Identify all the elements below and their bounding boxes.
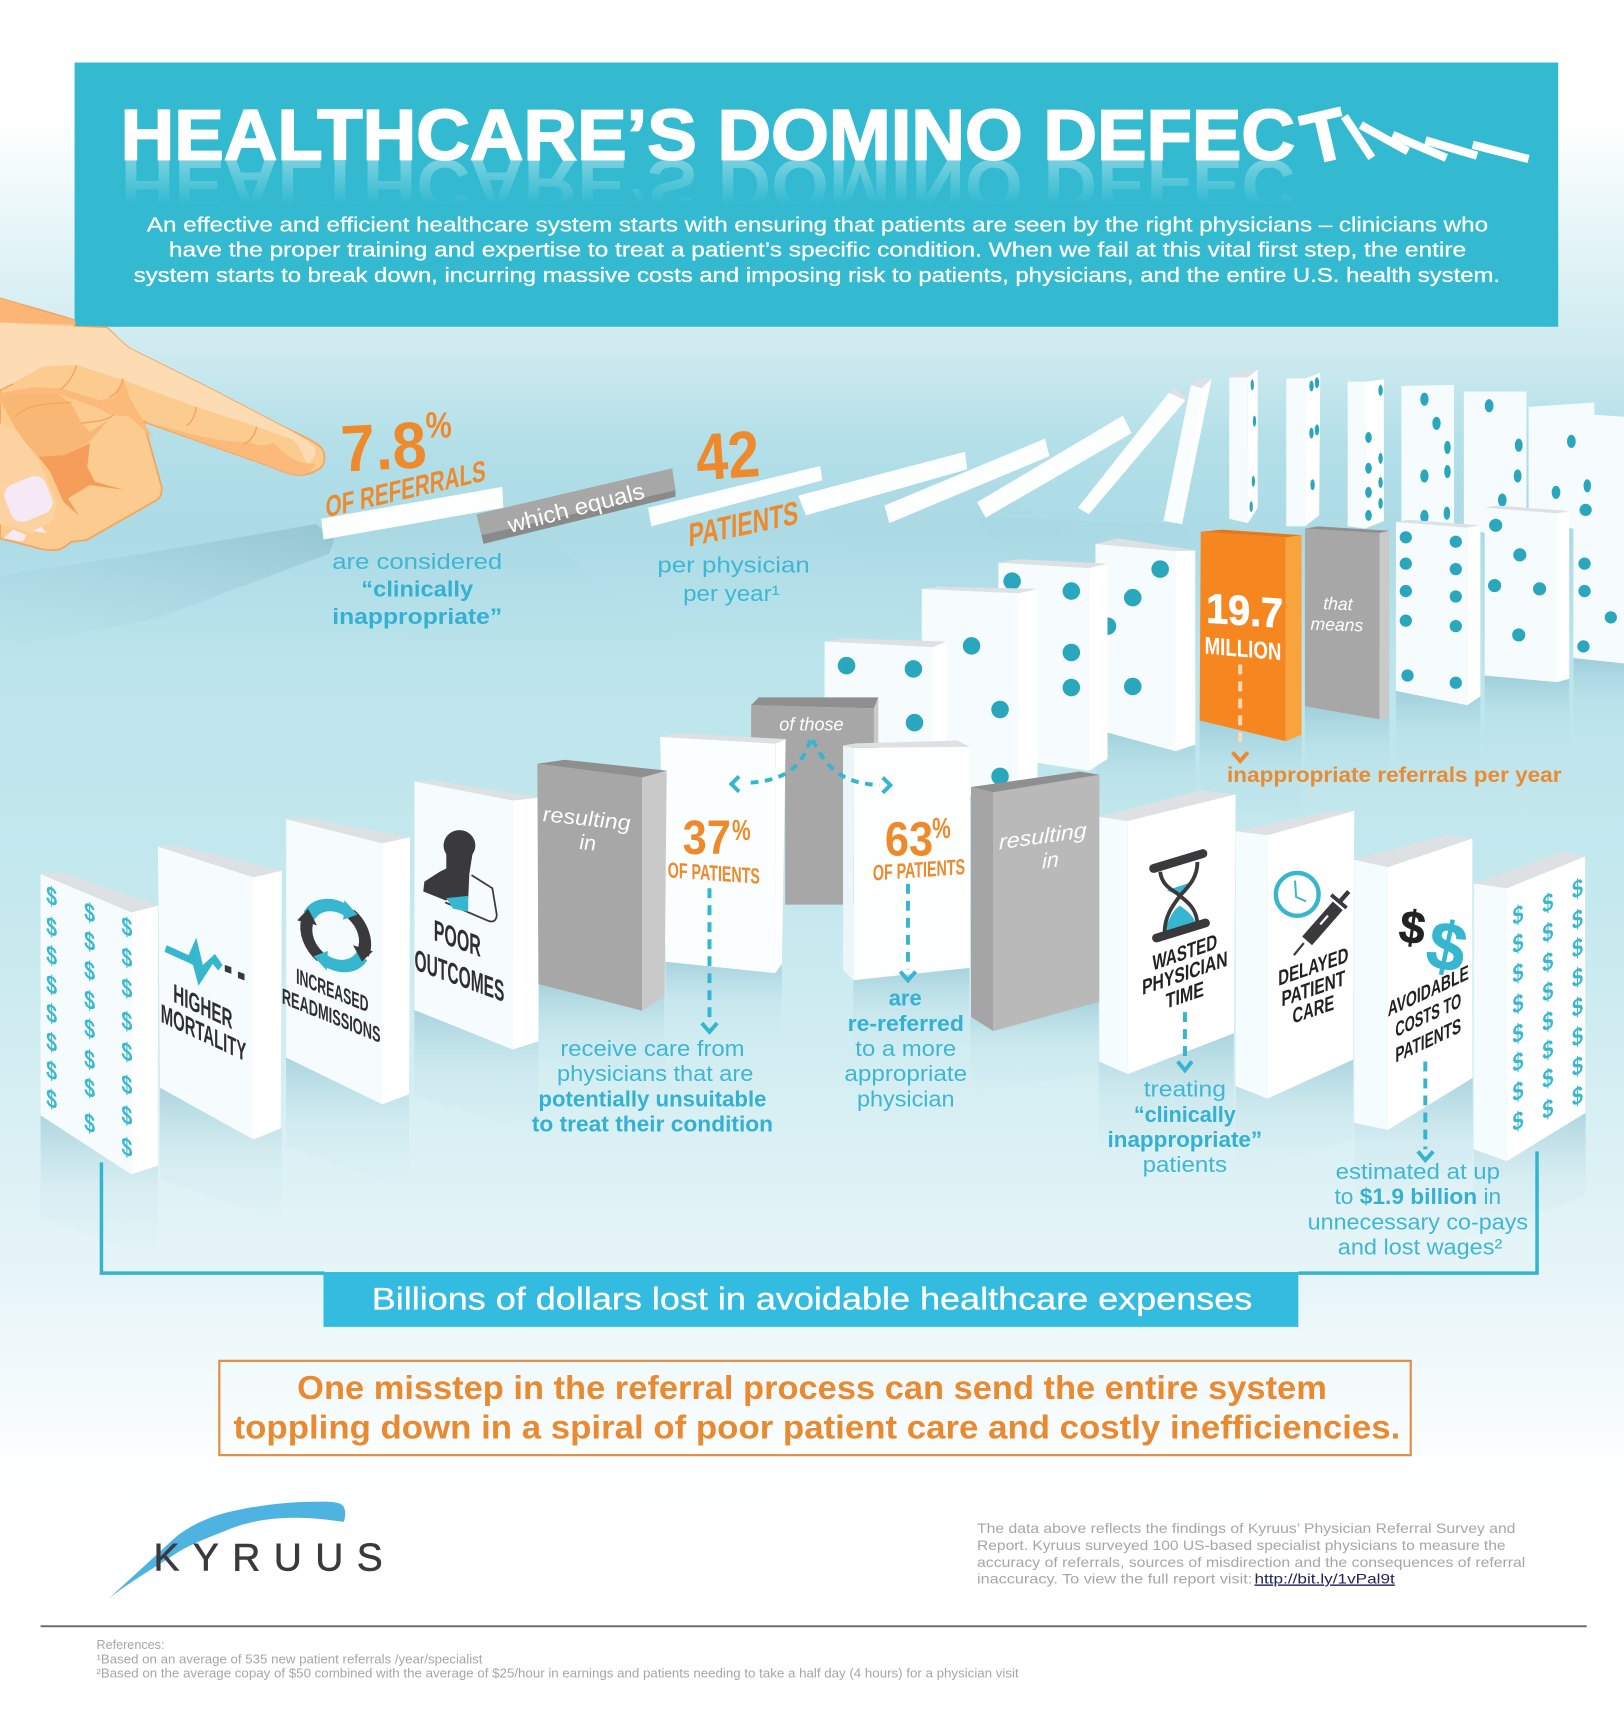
arrow: 63% down [900,884,916,980]
stat: 7.8% of referrals: 7.8 [339,407,428,486]
domino: delayed patient care [1236,811,1354,1098]
logo: Kyruus [109,1502,383,1599]
domino: dollars right: $ [1542,975,1553,1008]
caption: re-referred: to a more [855,1036,956,1061]
domino: ten dots [1396,520,1480,705]
callout: one misstep: toppling down in a spiral of poor patient care and costly inefficiencies. [234,1409,1400,1446]
intro paragraph: An effective and efficient healthcare system starts with ensuring that patients are seen by the right physicians – clinicians who [147,214,1488,236]
caption: estimated: estimated at up [1336,1159,1500,1184]
caption: per physician per year: per year¹ [683,581,780,606]
domino: dollars left: $ [84,1012,95,1045]
domino: dollars left: $ [46,997,57,1030]
domino: dollars left: $ [46,1083,57,1115]
domino: wasted physician time: PHYSICIAN [1142,946,1228,1000]
domino: resulting in (left): in [579,830,596,856]
domino: poor outcomes: OUTCOMES [414,943,504,1009]
stat: 7.8% of referrals: OF REFERRALS [326,455,486,524]
domino: dollars left: $ [84,954,95,987]
survey note: inaccuracy. To view the full report visit: [977,1571,1252,1587]
domino: avoidable costs to patients [1354,834,1473,1130]
references [96,1638,1019,1681]
domino: 19.7 million orange: MILLION [1205,633,1281,666]
domino: dollars right: $ [1542,945,1553,978]
references: References: [96,1638,164,1652]
domino: higher mortality [158,845,282,1139]
domino: dollars left: $ [84,1043,95,1076]
domino: dollars right: $ [1512,1017,1523,1049]
caption: receive care: receive care from [560,1036,745,1061]
domino: dollars right [1474,851,1585,1161]
falling domino 5 [884,439,1049,523]
domino: dollars right: $ [1572,1020,1583,1053]
domino: increased readmissions: INCREASED [296,963,368,1017]
dominoes with dots: stepped [1095,538,1195,751]
domino: far right partial [1573,493,1624,663]
domino: dollars left: $ [121,910,132,943]
domino: dollars left: $ [121,1005,132,1037]
domino: poor outcomes [414,780,540,1049]
standing domino 4 [1401,385,1454,526]
caption: receive care: potentially unsuitable [538,1086,766,1111]
caption: estimated: unnecessary co-pays [1308,1209,1528,1234]
icon: syringe [1294,892,1349,955]
caption: estimated: and lost wages² [1338,1234,1503,1259]
arrow: avoidable costs down [1418,1061,1433,1160]
domino: poor outcomes: POOR [434,914,481,964]
caption: receive care [532,1036,773,1137]
domino: dollars left: $ [84,925,95,957]
domino: dollars right: $ [1572,990,1583,1023]
domino: increased readmissions [282,818,410,1104]
domino: dollars right: $ [1512,927,1523,960]
banner: billions of dollars [323,1272,1298,1327]
domino: dollars left: $ [121,972,132,1004]
stat: 42 patients [689,416,798,555]
domino: which equals [476,468,675,544]
back row: standing dominoes [1229,370,1624,546]
domino: dollars left: $ [121,941,132,974]
domino: dollars right: $ [1542,1005,1553,1037]
domino: dollars right: $ [1512,1045,1523,1078]
domino: dollars left: $ [121,1131,132,1164]
domino: dollars left [41,872,158,1174]
domino: delayed patient care: CARE [1293,990,1334,1029]
caption: re-referred: are [889,986,922,1011]
caption: estimated [1308,1159,1528,1259]
caption: clinically inappropriate: are considered [332,549,502,574]
falling domino 6 [977,416,1132,518]
caption: per physician per year: per physician [657,552,810,577]
domino: dollars right: $ [1572,1050,1583,1082]
domino: dollars right: $ [1542,1062,1553,1094]
domino: 63% of patients: OF PATIENTS [873,854,965,885]
stat: 7.8% of referrals [326,405,486,524]
domino: that means: means [1310,614,1364,635]
domino: dollars left: $ [121,1068,132,1101]
caption: treating: patients [1143,1152,1227,1177]
banner: billions of dollars: Billions of dollars lost in avoidable healthcare expenses [372,1280,1252,1316]
arrow: wasted time down [1178,1012,1192,1070]
survey note [977,1521,1525,1587]
domino: dollars right: $ [1542,916,1553,949]
domino: 63% of patients: % [932,813,951,845]
domino: dollars left: $ [46,969,57,1001]
domino: dollars right: $ [1572,961,1583,994]
middle row right: dots dominoes [825,493,1624,795]
floor shadows beneath dominoes [41,469,1624,1261]
falling domino 8 [1163,378,1212,524]
domino: avoidable costs to patients: PATIENTS [1395,1013,1461,1067]
stat: 42 patients: 42 [693,416,762,494]
standing domino 7 [1591,415,1624,515]
standing domino 2 [1286,373,1320,526]
header panel [75,63,1558,327]
caption: treating: inappropriate” [1108,1127,1262,1152]
falling domino 4 [798,452,967,515]
domino: dollars left: $ [46,880,57,912]
domino: 37% of patients [660,733,786,973]
caption: clinically inappropriate: “clinically [361,577,474,602]
domino: dollars left: $ [84,896,95,929]
domino: dollars left: $ [121,1035,132,1068]
domino: resulting in (right): resulting [999,818,1087,854]
domino: delayed patient care: DELAYED [1278,942,1348,991]
domino: resulting in (left) [537,760,667,1011]
caption: clinically inappropriate [332,549,502,629]
domino: dollars left: $ [84,1072,95,1104]
icon: clock [1276,873,1319,916]
domino: dollars left: $ [46,939,57,972]
domino: 63% of patients: 63 [885,812,933,866]
domino: resulting in (right): in [1042,847,1059,874]
stat: 42 patients: PATIENTS [689,495,798,555]
survey note: Report. Kyruus surveyed 100 US-based specialist physicians to measure the [977,1538,1506,1554]
hand shadow [0,524,334,647]
caption: per physician per year [657,552,810,606]
domino: dollars right: $ [1572,1079,1583,1112]
survey note: accuracy of referrals, sources of misdirection and the consequences of referral [977,1555,1525,1571]
top row: falling dominoes [321,378,1212,544]
caption: re-referred: re-referred [848,1011,964,1036]
domino: dollars right: $ [1572,903,1583,935]
domino: 37% of patients: 37 [683,811,731,865]
icon: patient with sling [423,830,497,921]
domino: five dots [1485,506,1569,682]
domino: dollars right: $ [1512,1104,1523,1137]
caption: treating [1108,1077,1262,1177]
standing domino 5 [1464,391,1526,546]
arrow: 19.7 million down [1233,665,1248,761]
title: HEALTHCARE’S DOMINO DEFEC [121,96,1295,176]
caption: receive care: to treat their condition [532,1112,773,1137]
domino: higher mortality: MORTALITY [161,998,247,1068]
domino: 7.8% [321,487,503,540]
domino: wasted physician time: WASTED [1152,929,1217,976]
domino: 19.7 million orange [1200,530,1302,741]
caption: treating: treating [1144,1077,1226,1102]
icon: teal dollar: $ [1420,906,1473,988]
stat: 7.8% of referrals: % [425,405,452,446]
title reflection: HEALTHCARE’S DOMINO DEFEC [121,144,1295,224]
caption: re-referred: physician [857,1086,955,1111]
domino: of those [751,697,878,905]
domino: dollars right: $ [1572,872,1583,905]
icon: readmission cycle [297,889,373,982]
caption: re-referred: appropriate [844,1061,967,1086]
domino: resulting in (right) [971,772,1099,1031]
title toppling T and dominoes [1295,93,1529,181]
logo: Kyruus: KYRUUS [154,1536,383,1579]
intro paragraph: system starts to break down, incurring massive costs and imposing risk to patients, physicians, and the entire U.S. health system. [134,265,1500,287]
domino: dollars right: $ [1512,898,1523,931]
domino: which equals: which equals [504,477,647,538]
domino: dollars right: $ [1572,931,1583,964]
domino: higher mortality: HIGHER [173,978,232,1035]
falling domino 7 [1078,388,1185,514]
callout: one misstep [219,1361,1411,1455]
survey note: The data above reflects the findings of Kyruus’ Physician Referral Survey and [977,1521,1515,1537]
domino: of those: of those [779,714,844,734]
standing domino 1 [1229,370,1258,523]
domino: 63% of patients [843,741,970,980]
icon: heartbeat [164,938,245,986]
survey note: http://bit.ly/1vPal9t [1254,1571,1395,1587]
intro paragraph: have the proper training and expertise to treat a patient’s specific condition. When we fail at this vital first step, the entire [169,240,1466,262]
icon: pointing hand [0,298,324,550]
domino: delayed patient care: PATIENT [1282,965,1346,1012]
domino: wasted physician time: TIME [1166,976,1204,1014]
domino: dollars right: $ [1542,1033,1553,1066]
domino: avoidable costs to patients: AVOIDABLE [1388,960,1469,1022]
icon: hourglass [1154,854,1206,938]
domino: dollars left: $ [84,1107,95,1139]
domino: dollars right: $ [1542,886,1553,919]
domino: dollars left: $ [46,910,57,943]
domino: dollars right: $ [1512,956,1523,989]
domino: dollars left: $ [46,1054,57,1087]
references: ¹Based on an average of 535 new patient referrals /year/specialist [96,1652,483,1666]
icon: black dollar: $ [1396,900,1429,955]
domino: dollars left: $ [84,984,95,1017]
references: ²Based on the average copay of $50 combined with the average of $25/hour in earnings and patients needing to take a half day (4 hours) for a physician visit [96,1667,1019,1681]
caption: estimated: to $1.9 billion in [1335,1184,1501,1209]
title toppling T and dominoes: T [1295,93,1355,181]
domino: dollars right: $ [1542,1092,1553,1125]
domino: 19.7 million orange: 19.7 [1206,584,1283,637]
caption: treating: “clinically [1134,1102,1236,1127]
domino: dollars right: $ [1512,1075,1523,1108]
intro paragraph [134,214,1500,287]
domino: 37% of patients: % [732,815,751,847]
arrow: 37% down [702,888,717,1032]
domino: resulting in (left): resulting [543,802,631,835]
standing domino 3 [1348,379,1384,529]
caption: inappropriate referrals per year: inappropriate referrals per year [1227,764,1561,787]
domino: dollars left: $ [121,1099,132,1132]
domino: 37% of patients: OF PATIENTS [668,857,760,889]
caption: receive care: physicians that are [557,1061,753,1086]
domino: dollars left: $ [46,1026,57,1058]
domino: 42 [648,466,822,526]
domino: that means [1305,526,1389,719]
callout: one misstep: One misstep in the referral process can send the entire system [297,1369,1327,1406]
bracket connecting dollars dominoes [101,1151,1537,1273]
domino: avoidable costs to patients: COSTS TO [1395,988,1461,1042]
domino: increased readmissions: READMISSIONS [282,983,381,1048]
domino: that means: that [1323,593,1354,614]
caption: clinically inappropriate: inappropriate” [332,604,502,629]
standing domino 6 [1529,402,1594,535]
domino: wasted physician time [1099,790,1236,1074]
caption: re-referred [844,986,967,1111]
arrows: of those split [731,740,890,793]
domino: dollars right: $ [1512,987,1523,1020]
